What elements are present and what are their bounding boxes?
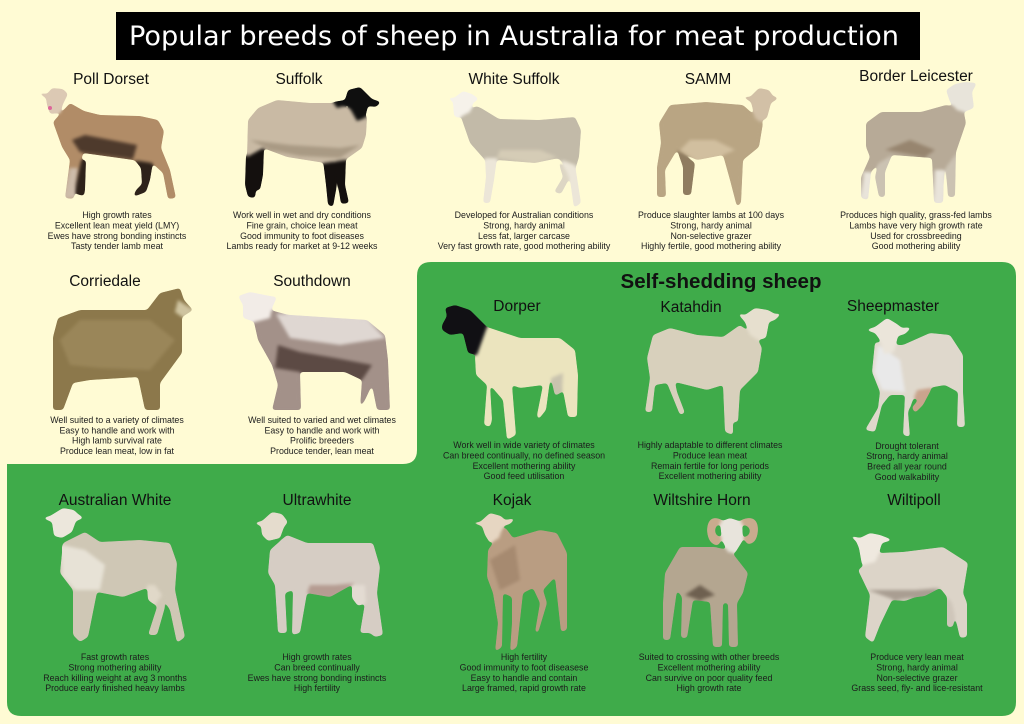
traits: Wiltshire Horn: Excellent mothering ability [658, 662, 761, 672]
sheep: Katahdin [645, 308, 782, 435]
traits: Sheepmaster: Drought tolerant [875, 441, 939, 451]
traits: Border Leicester: Good mothering ability [872, 241, 961, 251]
traits: Katahdin: Excellent mothering ability [659, 471, 762, 481]
sheep: Southdown [238, 292, 390, 410]
sheep: White Suffolk [446, 91, 581, 208]
breed: Dorper [442, 298, 605, 481]
traits: Katahdin: Produce lean meat [673, 450, 748, 460]
breed: Suffolk: Suffolk [275, 71, 323, 88]
traits: Poll Dorset: Tasty tender lamb meat [71, 241, 163, 251]
traits: Wiltipoll: Strong, hardy animal [876, 662, 958, 672]
traits: SAMM: Non-selective grazer [670, 231, 752, 241]
traits: Southdown: Produce tender, lean meat [270, 446, 374, 456]
traits: Suffolk: Work well in wet and dry conditions [233, 210, 372, 220]
breed: Australian White [42, 492, 187, 693]
traits: Poll Dorset: Excellent lean meat yield (LMY) [55, 220, 179, 230]
traits: Wiltipoll: Non-selective grazer [876, 673, 958, 683]
traits: White Suffolk: Less fat, larger carcase [478, 231, 570, 241]
breed: Corriedale [50, 273, 193, 456]
traits: Wiltshire Horn: Suited to crossing with other breeds [639, 652, 780, 662]
title banner [116, 12, 920, 60]
traits: White Suffolk: Developed for Australian conditions [455, 210, 594, 220]
breed: Border Leicester: Border Leicester [859, 68, 973, 85]
breed: Wiltipoll [848, 492, 983, 693]
traits: White Suffolk: Very fast growth rate, good mothering ability [438, 241, 611, 251]
traits: Ultrawhite: Ewes have strong bonding instincts [248, 673, 387, 683]
sheep: Kojak [468, 513, 567, 652]
breed: Ultrawhite [248, 492, 387, 693]
sheep: Wiltshire Horn [663, 518, 758, 647]
traits: Australian White: Reach killing weight at avg 3 months [43, 673, 187, 683]
sheep: Ultrawhite [253, 512, 383, 637]
breed: Southdown [238, 273, 396, 456]
traits: Southdown: Well suited to varied and wet climates [248, 415, 396, 425]
breed: White Suffolk: White Suffolk [468, 71, 560, 88]
sheep: Sheepmaster [865, 318, 965, 437]
breed: Katahdin [638, 299, 783, 481]
traits: Ultrawhite: Can breed continually [274, 662, 360, 672]
sheep: Border Leicester [861, 82, 977, 203]
sheep: Suffolk [245, 87, 381, 207]
traits: SAMM: Produce slaughter lambs at 100 days [638, 210, 785, 220]
breed: Wiltshire Horn: Wiltshire Horn [653, 492, 751, 509]
title banner: Popular breeds of sheep in Australia for meat production [129, 21, 899, 52]
sheep: Wiltipoll [848, 533, 968, 643]
traits: Border Leicester: Produces high quality, grass-fed lambs [840, 210, 992, 220]
breed: Ultrawhite: Ultrawhite [283, 492, 351, 509]
breed: Wiltshire Horn [639, 492, 780, 693]
traits: Wiltshire Horn: Can survive on poor quality feed [646, 673, 772, 683]
traits: Kojak: Large framed, rapid growth rate [462, 683, 586, 693]
traits: Corriedale: Easy to handle and work with [59, 426, 175, 436]
traits: Dorper: Excellent mothering ability [473, 461, 576, 471]
traits: White Suffolk: Strong, hardy animal [483, 220, 565, 230]
traits: Sheepmaster: Strong, hardy animal [866, 451, 948, 461]
breed: Poll Dorset [36, 71, 187, 251]
traits: Sheepmaster: Good walkability [875, 472, 940, 482]
breed: White Suffolk [438, 71, 611, 251]
breed: Sheepmaster [847, 298, 965, 482]
breed: Sheepmaster: Sheepmaster [847, 298, 939, 315]
breed: Wiltipoll: Wiltipoll [887, 492, 941, 509]
traits: Katahdin: Highly adaptable to different climates [638, 440, 783, 450]
traits: Ultrawhite: High growth rates [282, 652, 352, 662]
traits: Suffolk: Fine grain, choice lean meat [246, 220, 358, 230]
traits: Wiltipoll: Produce very lean meat [870, 652, 964, 662]
sheep: Australian White [42, 508, 185, 643]
traits: Border Leicester: Lambs have very high growth rate [849, 220, 983, 230]
traits: Katahdin: Remain fertile for long periods [651, 461, 770, 471]
breed: Border Leicester [840, 68, 992, 251]
traits: Poll Dorset: High growth rates [82, 210, 152, 220]
traits: Corriedale: High lamb survival rate [72, 436, 162, 446]
breed: Dorper: Dorper [493, 298, 541, 315]
breed: Suffolk [227, 71, 381, 251]
breed: Australian White: Australian White [59, 492, 171, 509]
sheep: Corriedale [53, 288, 193, 410]
traits: Dorper: Good feed utilisation [484, 471, 564, 481]
breed: Poll Dorset: Poll Dorset [73, 71, 150, 88]
traits: Wiltshire Horn: High growth rate [677, 683, 742, 693]
sheep: Dorper [442, 305, 578, 440]
traits: Southdown: Prolific breeders [290, 436, 355, 446]
traits: Ultrawhite: High fertility [294, 683, 341, 693]
traits: Corriedale: Well suited to a variety of climates [50, 415, 184, 425]
traits: Dorper: Can breed continually, no defined season [443, 450, 605, 460]
traits: Dorper: Work well in wide variety of climates [453, 440, 595, 450]
breed: Kojak: Kojak [493, 492, 532, 509]
sheep: SAMM [657, 88, 779, 207]
traits: Border Leicester: Used for crossbreeding [870, 231, 962, 241]
panel: self-shedding sheep [7, 262, 1016, 716]
traits: Kojak: Good immunity to foot diseasese [460, 662, 588, 672]
traits: SAMM: Strong, hardy animal [670, 220, 752, 230]
breed: SAMM: SAMM [685, 71, 731, 88]
traits: Sheepmaster: Breed all year round [867, 462, 947, 472]
traits: Wiltipoll: Grass seed, fly- and lice-resistant [851, 683, 983, 693]
traits: Corriedale: Produce lean meat, low in fat [60, 446, 175, 456]
breed: Kojak [460, 492, 588, 693]
breed: SAMM [638, 71, 785, 251]
traits: Australian White: Strong mothering ability [69, 662, 162, 672]
traits: Kojak: High fertility [501, 652, 548, 662]
traits: Suffolk: Lambs ready for market at 9-12 weeks [227, 241, 378, 251]
sheep: Poll Dorset [36, 88, 176, 199]
traits: SAMM: Highly fertile, good mothering ability [641, 241, 782, 251]
heading: self-shedding sheep: Self-shedding sheep [620, 270, 822, 293]
traits: Australian White: Fast growth rates [81, 652, 150, 662]
traits: Australian White: Produce early finished heavy lambs [45, 683, 185, 693]
traits: Suffolk: Good immunity to foot diseases [240, 231, 365, 241]
breed: Southdown: Southdown [273, 273, 351, 290]
traits: Kojak: Easy to handle and contain [471, 673, 577, 683]
traits: Poll Dorset: Ewes have strong bonding instincts [48, 231, 187, 241]
breed: Corriedale: Corriedale [69, 273, 141, 290]
breed: Katahdin: Katahdin [660, 299, 722, 316]
traits: Southdown: Easy to handle and work with [264, 426, 380, 436]
